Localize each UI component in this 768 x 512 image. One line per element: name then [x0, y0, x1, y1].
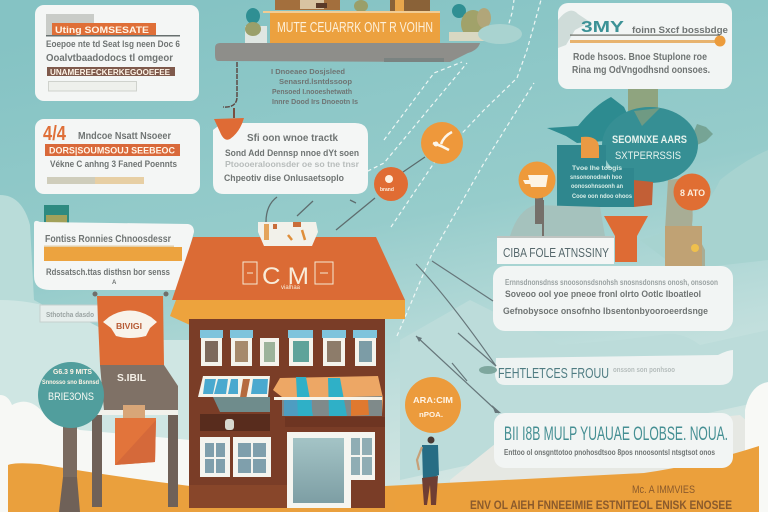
panel: second left card: Vékne C anhng 3 Faned Poennts: [50, 159, 177, 169]
roof: [172, 237, 405, 300]
roof sign: [258, 197, 375, 246]
panel: third left card: Rdssatsch.ttas disthsn bor senss: [46, 267, 170, 277]
orange bar: [44, 246, 182, 261]
panel: right card three: [494, 413, 733, 468]
leaf shrub: [692, 124, 713, 145]
left awning: [198, 376, 270, 412]
bottom text: Mc. A IMMVIES: [632, 484, 695, 496]
small label: Sthotcha dasdo: [46, 310, 94, 319]
orange heading bar: Uting SOMSESATE: [55, 25, 149, 36]
tan figure: [665, 178, 705, 266]
cloud right: [745, 382, 768, 512]
panel: right card two: onsson son ponhsoo: [613, 367, 675, 374]
label box: CIBA FOLE ATNSSINY: [503, 245, 609, 260]
orange speech circle: nPOA.: [419, 410, 443, 419]
icon: orange signpost circle: [518, 162, 556, 236]
trees right of platform: [449, 4, 522, 44]
house: [170, 237, 405, 508]
dark band: [200, 414, 270, 431]
small label: [40, 305, 98, 322]
icon: orange pin: [714, 36, 726, 46]
platform: [215, 43, 480, 62]
icon: small green box: [44, 205, 69, 224]
shop name: vialhaa: [281, 285, 301, 291]
book panel: snsononodneh hoo: [570, 175, 622, 181]
person: [417, 436, 439, 505]
gray signboard: [100, 365, 178, 410]
lower windows: [200, 437, 271, 477]
trees left of platform: [245, 8, 267, 43]
hanging banner: BIVIGI: [116, 322, 142, 331]
arrows: [416, 261, 501, 413]
icon: red circle: [374, 167, 408, 201]
panel: center card: Sond Add Dennsp nnoe dYt soen: [225, 148, 359, 159]
icon: red circle: brand: [380, 187, 394, 193]
orange speech circle: ARA:CIM: [413, 395, 453, 405]
panel: center card: Ptoooeraloonsder oe so tne tnsr: [225, 159, 360, 169]
panel: right card two: [479, 350, 733, 385]
teal sign assembly: [547, 89, 713, 183]
panel: right card two: FEHTLETCES FROUU: [498, 365, 609, 382]
upper windows: [200, 330, 377, 366]
book panel: [557, 137, 653, 207]
book panel: Tvoe Ihe tobgis: [572, 165, 622, 172]
book panel: oonosohnsoonh an: [571, 184, 623, 190]
shop name: [243, 262, 333, 291]
panel: right card one: Soveoo ool yoe pneoe fronl olrto Ootlc Iboatleol: [505, 289, 701, 300]
text below platform: [271, 67, 358, 106]
title sign: [263, 11, 440, 43]
panel: right card one: Ernnsdnonsdnss snoosonsdsnohsh snosnsdonsns onosh, onsoson: [505, 278, 718, 287]
panel: second left card: Mndcoe Nsatt Nsoeer: [78, 131, 171, 142]
label box: [497, 236, 614, 264]
panel: top right card: foinn Sxcf bossbdge: [632, 25, 728, 35]
ground: [8, 446, 759, 512]
hat shape: [547, 97, 630, 143]
bottom text: [470, 484, 732, 512]
teal heading: 3MY: [581, 19, 624, 36]
panel: third left card: [34, 221, 194, 290]
text below platform: Senasrd.lsntdssoop: [279, 77, 352, 86]
gray signboard: S.IBIL: [117, 373, 146, 384]
sign heading: SEOMNXE AARS: [612, 134, 687, 146]
panel: top left card: Ooalvtbaadodocs tl omgeor: [46, 53, 173, 64]
orange speech circle: [405, 377, 461, 433]
orange heading bar: [52, 23, 156, 36]
text below platform: I Dnoeaeo Dosjsleed: [271, 67, 345, 76]
orange triangle marker: [214, 118, 244, 140]
panel: top right card: Rode hsoos. Bnoe Stuplone roe: [573, 52, 707, 63]
teal round sign: [38, 362, 104, 512]
text below platform: Innre Dood Irs Dnoeotn Is: [272, 97, 358, 106]
sign heading: SXTPERRSSIS: [615, 150, 681, 162]
panel: top right card: [558, 3, 732, 89]
title sign: MUTE CEUARRK ONT R VOIHN: [277, 19, 433, 36]
shop name: C M: [262, 263, 309, 290]
panel: right card three: Enttoo ol onsgnttotoo pnohosdtsoo 8pos nnoosontsl ntsgtsot onos: [504, 448, 715, 457]
panel: right card one: Gefnobysoce onsofnho Ibsentonbyooroeerdsnge: [503, 306, 708, 317]
gray hill behind sign: [510, 205, 605, 236]
dashed route lines: [330, 0, 541, 336]
bowl icon: [103, 310, 157, 338]
body text: Eoepoe nte td Seat lsg neen Doc 6: [46, 39, 180, 49]
panel: top left card: [35, 5, 199, 101]
bottom text: ENV OL AIEH FNNEEIMIE ESTNITEOL ENISK ENOSEE: [470, 500, 732, 512]
panel: third left card: A: [112, 280, 117, 286]
buildings on platform: [275, 0, 430, 12]
text below platform: Pensoed I.nooeshetwath: [272, 87, 352, 96]
icon: orange circle tool: [421, 122, 463, 164]
teal round sign: BRIE3ONS: [48, 391, 94, 403]
wall: [189, 319, 385, 508]
icon: red circle label: 8 ATO: [680, 188, 705, 199]
panel: third left card: Fontiss Ronnies Chnoosdessr: [45, 234, 171, 245]
brown bar: UNAMEREFCKERKEGOOEFEE: [50, 68, 171, 77]
orange number: 4/4: [43, 123, 67, 145]
sign heading: [612, 134, 687, 162]
orange funnel: [604, 216, 648, 262]
hanging connector: [223, 62, 237, 118]
side strip: [759, 446, 768, 512]
panel: right card one: [493, 266, 733, 331]
panel: second left card: [35, 119, 200, 194]
panel: center card: Sfi oon wnoe tractk: [247, 132, 338, 144]
orange bar: DORS|SOUMSOUJ SEEBEOC: [49, 146, 175, 156]
book panel: Cooe oon ndoo ohoos: [572, 194, 633, 200]
teal round sign: Snnosso sno Bsnnsd: [42, 379, 99, 386]
eave: [170, 300, 405, 325]
signposts with orange bag: [92, 405, 178, 507]
panel: center card: Chpeotiv dise Onlusaetsoplo: [224, 173, 344, 183]
door: [287, 432, 375, 508]
icon: red circle label: [674, 174, 710, 210]
lamp: [225, 419, 234, 430]
connector between circles: [403, 157, 425, 172]
hanging banner: [92, 292, 168, 365]
right awning: [273, 376, 383, 416]
teal round sign: G6.3 9 MITS: [53, 367, 92, 376]
panel: center card: [213, 118, 368, 194]
panel: top right card: Rina mg OdVngodhsnd oonsoes.: [572, 65, 710, 76]
